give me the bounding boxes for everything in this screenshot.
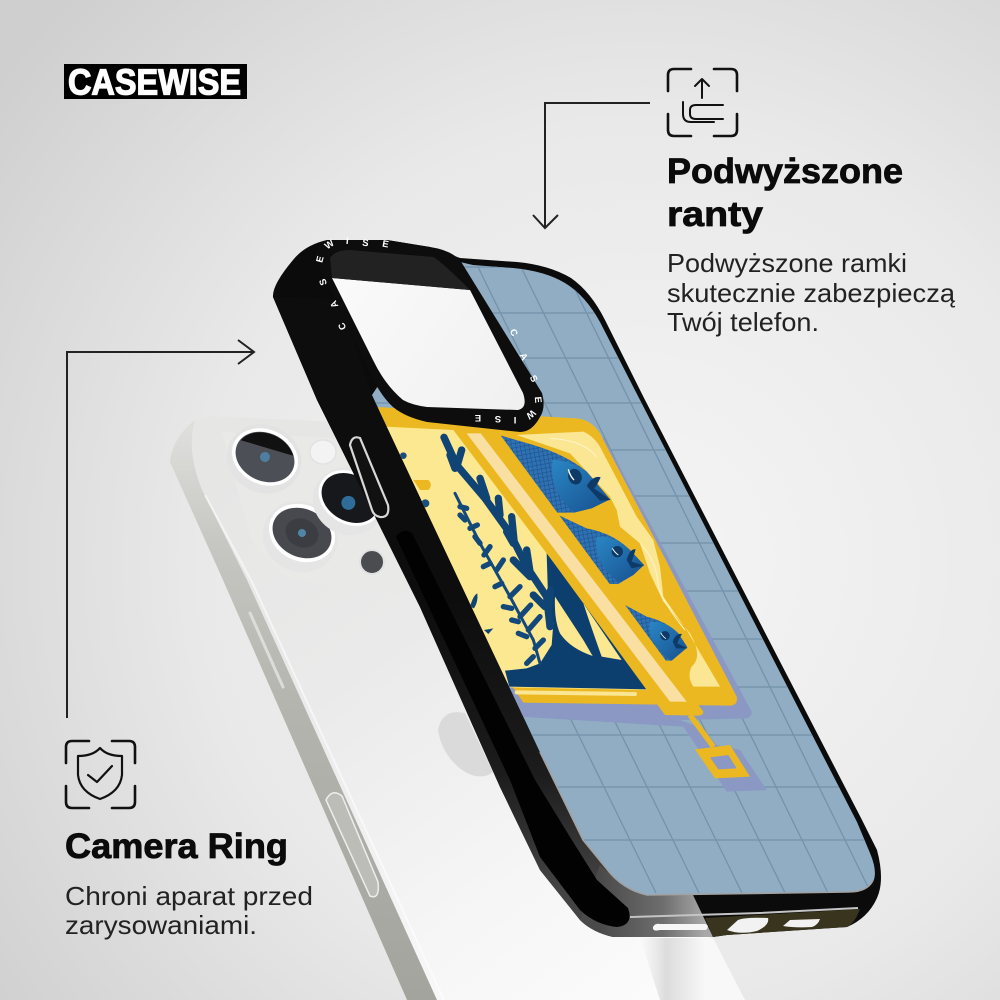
fish 3 [622,605,687,661]
white phone behind case [170,412,745,1000]
bottom olive strip [705,909,860,937]
text: raised edges description: Podwyższone ramki [667,248,907,278]
ring lettering: S [495,413,501,424]
ring lettering: E [314,255,327,264]
handle [690,715,713,747]
side button bottom [326,793,378,897]
ring lettering: A [517,351,530,363]
side highlight [205,495,444,1000]
phone side edge [170,420,437,1000]
lens right [300,455,396,548]
heading: camera ring: Camera Ring [65,827,288,866]
lower shading [640,938,745,1000]
side button top [250,613,283,687]
art shadow [503,437,767,792]
screen rim highlight [540,752,873,895]
side slot [396,531,630,927]
logo: CASEWISE [68,62,241,102]
ring lettering: S [361,238,369,249]
case shell [273,240,881,937]
ring lettering: S [317,277,330,287]
highlight line [550,438,685,630]
bottom highlight [630,908,858,917]
arrow: left callout [67,340,254,718]
ring lettering: I [514,414,516,425]
apple logo [438,712,493,777]
lens hole [332,278,525,410]
fish 2 [555,515,644,584]
lens bottom [251,489,350,584]
ring lettering: A [328,299,341,309]
volume pill [350,437,388,517]
ring lettering: E [532,396,543,403]
left light area [370,427,650,690]
artwork [370,407,767,792]
port centre [727,918,768,933]
arrow: top callout [533,103,650,228]
text: camera ring description: Chroni aparat przed [65,881,313,911]
diagonal strip [457,430,703,716]
ring lettering: C [507,327,520,339]
seaweed small [455,493,543,663]
camera plateau [222,432,410,593]
left band [273,297,700,937]
black case [273,240,881,937]
blue back [372,262,875,894]
port right [783,919,820,927]
inner wall [330,250,470,290]
right light area [517,432,720,687]
grid [376,266,868,893]
text: raised edges description: skutecznie zabezpieczą [667,278,956,308]
heading: raised edges: Podwyższone [667,152,903,191]
camera ring [314,236,544,432]
small ornaments [400,452,494,634]
text: camera ring description [65,881,313,940]
ring lettering: I [345,236,349,247]
seabed [505,553,647,689]
translucent bottom corner [580,865,713,937]
bottom highlight [517,692,635,694]
seabed light wedges [555,597,593,656]
port left [653,924,708,931]
icon: shield [66,741,135,808]
heading: raised edges: ranty [667,195,764,234]
phone body [170,416,745,1000]
ring outer [315,240,544,432]
flash [310,440,336,464]
fish 1 [493,434,611,513]
ring lettering: W [323,238,336,252]
blue back panel with artwork [372,262,875,894]
diamond handle [695,745,750,778]
lens top [215,412,313,506]
seaweed big [444,437,551,627]
ring lettering: C [336,321,349,331]
sensor [360,550,384,574]
text: raised edges description [667,248,956,337]
ring lettering: E [381,239,390,251]
ring lettering: S [527,373,540,384]
ring lettering [314,236,543,425]
yellow frame [370,407,737,706]
text: camera ring description: zarysowaniami. [65,910,257,940]
heading: raised edges [667,152,903,234]
ring lettering: W [524,407,538,421]
icon: raised edges [668,69,737,136]
ring lettering: E [475,412,481,423]
text: raised edges description: Twój telefon. [667,307,819,337]
